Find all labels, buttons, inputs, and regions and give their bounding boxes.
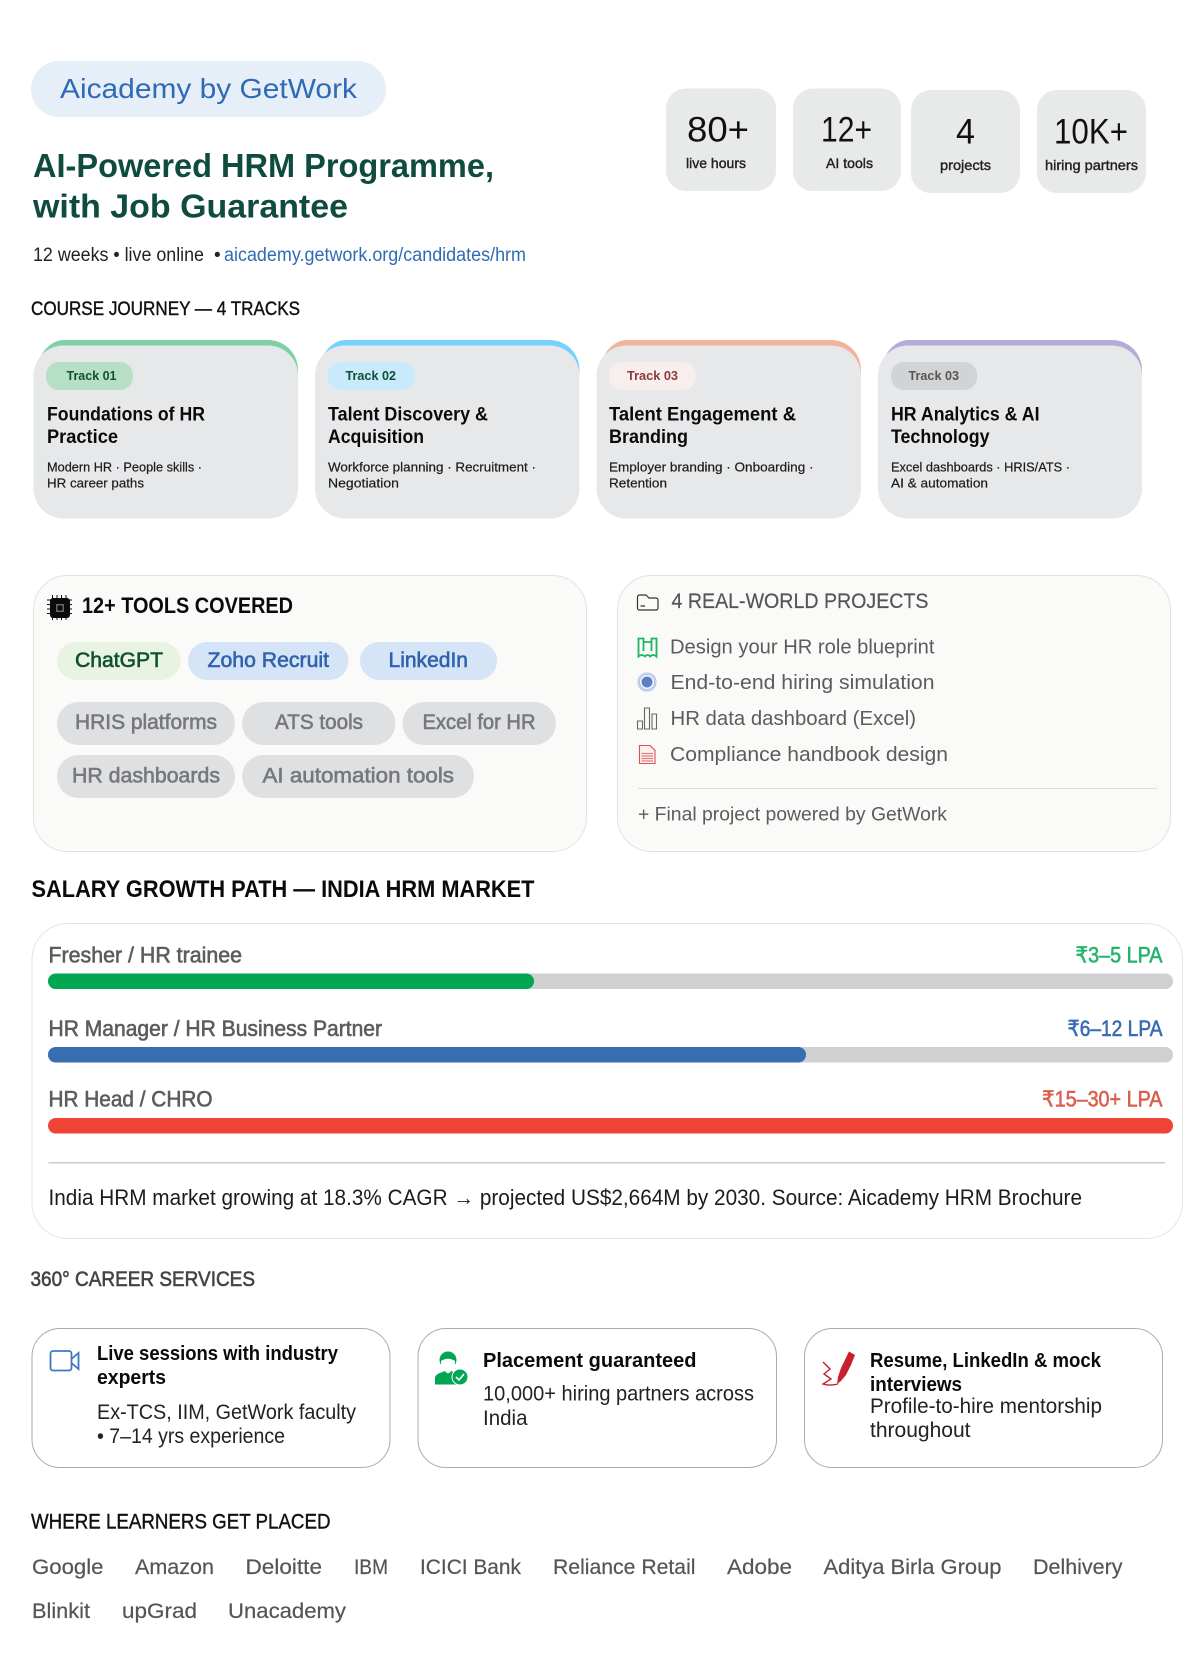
heading: course journey: COURSE JOURNEY — 4 TRACKS (31, 299, 300, 320)
service card: resume: throughout (870, 1419, 971, 1442)
track card 1: Modern HR · People skills · (47, 460, 202, 474)
salary row: manager: ₹6–12 LPA (1068, 1016, 1163, 1041)
service card: resume: interviews (870, 1374, 962, 1396)
icon: chip (47, 595, 72, 620)
heading: career services: 360° CAREER SERVICES (30, 1268, 255, 1291)
company list: upGrad (122, 1600, 197, 1623)
company list: Blinkit (32, 1600, 90, 1623)
tool pill: Excel for HR: Excel for HR (422, 711, 536, 734)
brand pill: Aicademy by GetWork (60, 73, 358, 104)
market note: India HRM market growing at 18.3% CAGR → projected US$2,664M by 2030. Source: Aicademy HRM Brochure (48, 1185, 1082, 1210)
track card 4: HR Analytics & AI (891, 404, 1040, 426)
footnote: final project: + Final project powered by GetWork (638, 804, 947, 826)
main title: with Job Guarantee (32, 188, 348, 224)
tool pill: LinkedIn: LinkedIn (388, 649, 468, 672)
salary row: fresher (48, 942, 1173, 989)
stat: live hours (666, 88, 776, 191)
subtitle with link: • (214, 245, 221, 266)
main title (32, 147, 494, 224)
service card: live sessions (32, 1328, 390, 1468)
stat: projects: projects (940, 157, 991, 173)
salary row: fresher: ₹3–5 LPA (1076, 942, 1163, 968)
company list: Delhivery (1033, 1556, 1123, 1579)
project: dashboard: HR data dashboard (Excel) (670, 707, 916, 730)
tool pill: Excel for HR (402, 702, 556, 745)
service card: live sessions: Ex-TCS, IIM, GetWork faculty (97, 1401, 356, 1424)
company list: Reliance Retail (553, 1556, 696, 1579)
tool pill: ChatGPT (57, 642, 180, 680)
tool pill: HRIS platforms (57, 702, 235, 745)
salary row: head: ₹15–30+ LPA (1042, 1086, 1163, 1112)
stat: hiring partners: hiring partners (1045, 157, 1138, 173)
stat: AI tools: 12+ (821, 110, 872, 150)
track card 1: Foundations of HR (47, 404, 205, 426)
service card: placement: Placement guaranteed (483, 1350, 696, 1372)
project: simulation: End-to-end hiring simulation (670, 671, 934, 694)
service card: resume: Profile-to-hire mentorship (870, 1395, 1102, 1418)
track card 1: Practice (47, 427, 118, 448)
service card: placement: 10,000+ hiring partners across (483, 1382, 754, 1406)
heading: projects: 4 REAL-WORLD PROJECTS (672, 590, 928, 613)
tool pill: Zoho Recruit: Zoho Recruit (208, 649, 329, 672)
main title: AI-Powered HRM Programme, (33, 147, 494, 184)
service card: resume (804, 1328, 1162, 1468)
company list: IBM (354, 1556, 388, 1579)
stat: hiring partners: 10K+ (1054, 112, 1128, 152)
track card 4: AI & automation (891, 476, 988, 490)
tool pill: ChatGPT: ChatGPT (75, 649, 163, 672)
track card 2: Track 02 (346, 368, 396, 383)
subtitle with link: aicademy.getwork.org/candidates/hrm (224, 245, 526, 266)
header: brand, title, subtitle (31, 61, 526, 266)
tool pill: AI automation tools (242, 755, 474, 798)
salary row: manager: HR Manager / HR Business Partner (48, 1016, 382, 1041)
tool pill: Zoho Recruit (188, 642, 348, 680)
salary row: head (48, 1086, 1173, 1134)
heading: placements: WHERE LEARNERS GET PLACED (31, 1510, 330, 1534)
tool pill: ATS tools: ATS tools (275, 711, 363, 734)
salary row: fresher: Fresher / HR trainee (48, 942, 242, 968)
track card 4 (878, 340, 1142, 518)
salary row: manager (48, 1016, 1173, 1062)
tool pill: HR dashboards: HR dashboards (72, 764, 220, 788)
tool pill: AI automation tools: AI automation tools (262, 764, 454, 788)
service card: resume: Resume, LinkedIn & mock (870, 1350, 1102, 1372)
track card 2: Talent Discovery & (328, 404, 488, 426)
service card: placement (418, 1328, 776, 1468)
stat: projects (911, 90, 1020, 193)
icon: pen (823, 1352, 855, 1385)
panel: tools covered (34, 576, 586, 852)
tool pill: LinkedIn (360, 642, 497, 680)
company list: Adobe (727, 1556, 792, 1579)
company list: Unacademy (228, 1600, 347, 1623)
heading: salary growth: SALARY GROWTH PATH — INDIA HRM MARKET (32, 876, 535, 903)
stats row (666, 88, 1146, 193)
salary row: head: HR Head / CHRO (48, 1086, 212, 1112)
track card 4: Technology (891, 427, 990, 448)
track card 2 (315, 340, 580, 518)
track card 3: Talent Engagement & (609, 404, 796, 426)
project: handbook: Compliance handbook design (670, 743, 948, 766)
track card 3 (596, 340, 861, 518)
stat: AI tools: AI tools (826, 155, 873, 171)
track card 2: Workforce planning · Recruitment · (328, 460, 536, 474)
track card 3: Retention (609, 476, 667, 490)
track card 4: Track 03 (908, 368, 959, 383)
subtitle with link (33, 245, 526, 266)
company list: Aditya Birla Group (824, 1556, 1002, 1579)
track card 3: Track 03 (627, 368, 678, 383)
subtitle with link: 12 weeks • live online (33, 245, 204, 266)
track card 1: HR career paths (47, 476, 145, 490)
company list: ICICI Bank (420, 1556, 521, 1579)
service card: placement: India (483, 1407, 528, 1430)
icon: person with check (435, 1352, 468, 1385)
track card 3: Branding (609, 427, 688, 448)
panel: real-world projects (618, 576, 1170, 852)
brand pill (31, 61, 386, 117)
tool pill: ATS tools (242, 702, 396, 745)
track card 1: Track 01 (66, 368, 116, 383)
track card 2: Acquisition (328, 427, 424, 448)
project: blueprint: Design your HR role blueprint (670, 636, 935, 658)
stat: AI tools (793, 88, 901, 191)
track card 3: Employer branding · Onboarding · (609, 460, 814, 474)
tool pill: HRIS platforms: HRIS platforms (75, 711, 217, 734)
stat: live hours: live hours (686, 155, 746, 171)
service card: live sessions: experts (97, 1367, 166, 1389)
track card 2: Negotiation (328, 476, 399, 490)
company list: Amazon (135, 1556, 214, 1579)
stat: live hours: 80+ (687, 110, 749, 150)
track card 4: Excel dashboards · HRIS/ATS · (891, 460, 1070, 474)
stat: projects: 4 (956, 112, 975, 152)
service card: live sessions: Live sessions with industry (97, 1343, 339, 1365)
tool pill: HR dashboards (57, 755, 235, 798)
icon: video camera (50, 1351, 78, 1370)
company list: Google (32, 1556, 104, 1579)
service card: live sessions: • 7–14 yrs experience (97, 1425, 285, 1448)
course tracks (34, 340, 1142, 518)
company list (32, 1556, 1123, 1623)
track card 1 (34, 340, 298, 518)
stat: hiring partners (1037, 90, 1146, 193)
heading: tools: 12+ TOOLS COVERED (82, 593, 293, 618)
icon: folder (638, 595, 658, 610)
company list: Deloitte (246, 1556, 322, 1579)
career services cards (32, 1328, 1162, 1468)
panel: salary growth chart (32, 924, 1182, 1238)
